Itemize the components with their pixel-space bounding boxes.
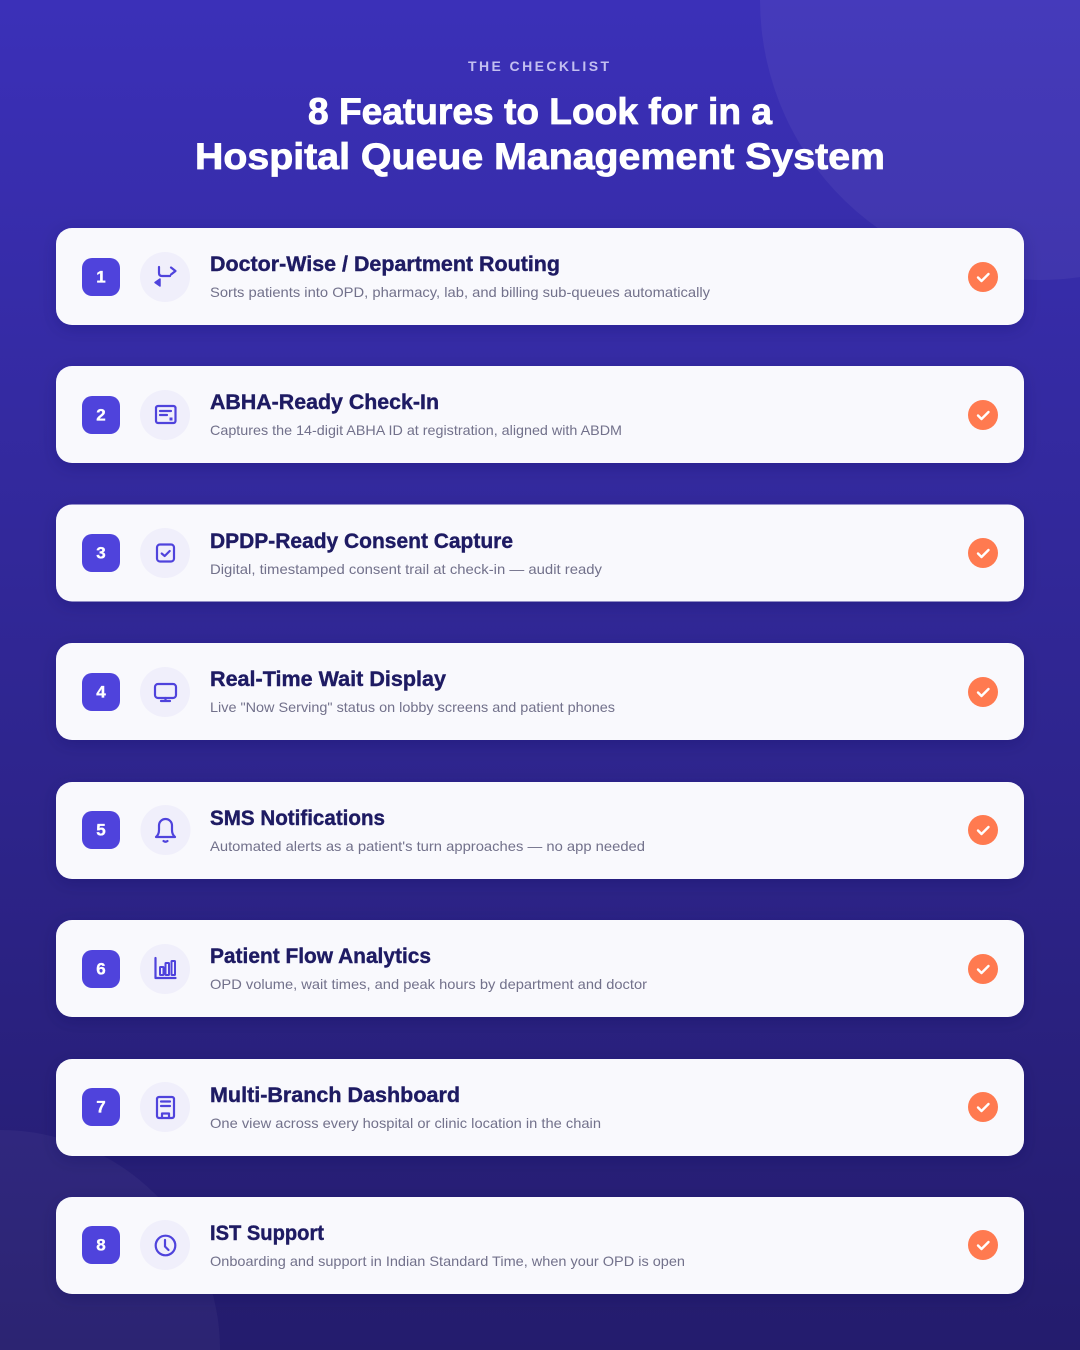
check 2 xyxy=(968,400,998,430)
number badge 4 xyxy=(82,673,120,711)
number badge 6 xyxy=(82,950,120,988)
check 4 xyxy=(968,677,998,707)
heading 4: Real-Time Wait Display xyxy=(210,668,446,691)
icon: branch building xyxy=(140,1082,190,1132)
title: Hospital Queue Management System xyxy=(195,136,885,177)
icon: monitor xyxy=(140,667,190,717)
heading 6: Patient Flow Analytics xyxy=(210,945,431,968)
number badge 1: 1 xyxy=(96,268,106,286)
number badge 8: 8 xyxy=(96,1236,106,1254)
description 7: One view across every hospital or clinic location in the chain xyxy=(210,1115,601,1131)
number badge 7 xyxy=(82,1088,120,1126)
icon: routing xyxy=(140,252,190,302)
icon: id card xyxy=(140,390,190,440)
heading 5: SMS Notifications xyxy=(210,807,385,830)
number badge 5: 5 xyxy=(96,820,106,840)
heading 1: Doctor-Wise / Department Routing xyxy=(210,253,560,276)
description 1: Sorts patients into OPD, pharmacy, lab, and billing sub-queues automatically xyxy=(210,284,710,300)
description 2: Captures the 14-digit ABHA ID at registration, aligned with ABDM xyxy=(210,422,622,438)
number badge 3: 3 xyxy=(96,544,106,562)
icon: consent checkbox xyxy=(140,528,190,578)
card 5 xyxy=(56,782,1024,879)
decorative circle bottom left xyxy=(0,1130,220,1350)
number badge 4: 4 xyxy=(96,682,106,702)
title xyxy=(195,91,885,177)
number badge 1 xyxy=(82,258,120,296)
description 5: Automated alerts as a patient's turn approaches — no app needed xyxy=(210,838,645,854)
check 6 xyxy=(968,954,998,984)
description 4: Live "Now Serving" status on lobby screens and patient phones xyxy=(210,699,615,715)
card 8 xyxy=(56,1197,1024,1294)
number badge 5 xyxy=(82,811,120,849)
heading 7: Multi-Branch Dashboard xyxy=(210,1084,460,1107)
icon: bar chart xyxy=(140,944,190,994)
heading 3: DPDP-Ready Consent Capture xyxy=(210,530,513,553)
description 8: Onboarding and support in Indian Standard Time, when your OPD is open xyxy=(210,1253,685,1269)
check 5 xyxy=(968,815,998,845)
card 4 xyxy=(56,643,1024,740)
title: 8 Features to Look for in a xyxy=(308,91,772,132)
number badge 6: 6 xyxy=(96,960,106,978)
eyebrow: THE CHECKLIST xyxy=(468,58,609,74)
number badge 2 xyxy=(82,396,120,434)
card 7 xyxy=(56,1059,1024,1156)
icon: clock xyxy=(140,1220,190,1270)
heading 2: ABHA-Ready Check-In xyxy=(210,391,439,414)
heading 8: IST Support xyxy=(210,1222,324,1245)
card 6 xyxy=(56,920,1024,1017)
number badge 3 xyxy=(82,534,120,572)
decorative circle top right xyxy=(760,0,1080,280)
check 7 xyxy=(968,1092,998,1122)
check 8 xyxy=(968,1230,998,1260)
number badge 2: 2 xyxy=(96,406,106,424)
check 3 xyxy=(968,538,998,568)
description 3: Digital, timestamped consent trail at check-in — audit ready xyxy=(210,561,602,577)
icon: bell xyxy=(140,805,190,855)
card 1 xyxy=(56,228,1024,325)
description 6: OPD volume, wait times, and peak hours by department and doctor xyxy=(210,976,647,992)
number badge 8 xyxy=(82,1226,120,1264)
card 2 xyxy=(56,366,1024,463)
number badge 7: 7 xyxy=(96,1098,106,1116)
check 1 xyxy=(968,262,998,292)
card 3 xyxy=(56,504,1024,602)
